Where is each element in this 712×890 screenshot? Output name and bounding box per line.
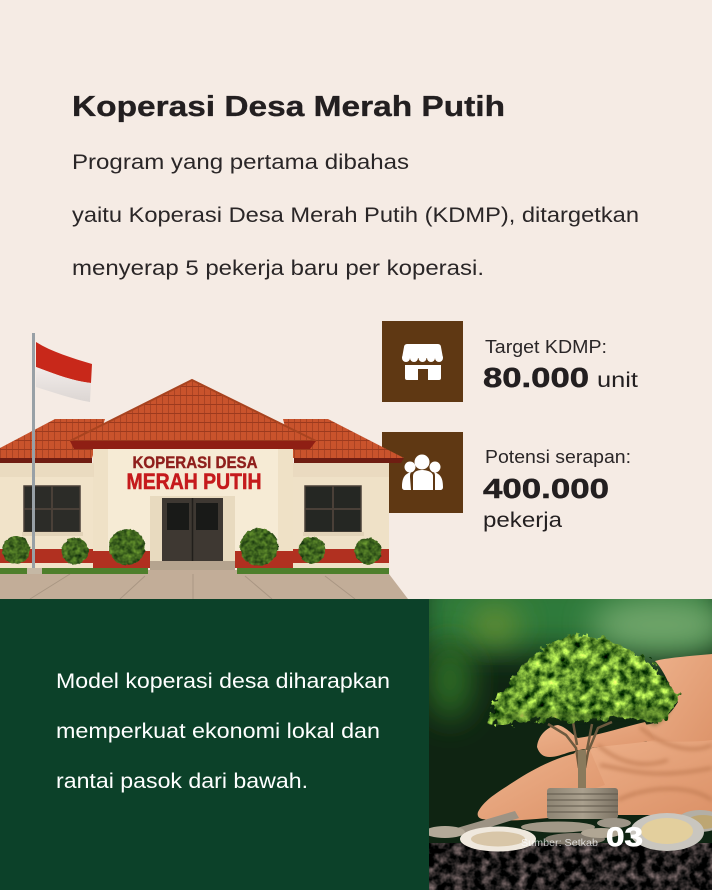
soil — [429, 843, 712, 890]
message text: Model koperasi desa diharapkan — [56, 670, 390, 693]
source note: Sumber: Setkab — [521, 838, 598, 849]
icon: store — [382, 321, 463, 402]
value: 400.000 pekerja — [483, 473, 609, 532]
intro text block: Program yang pertama dibahas — [72, 151, 409, 174]
message text: memperkuat ekonomi lokal dan — [56, 720, 380, 743]
intro text block — [72, 151, 639, 280]
label: target KDMP: Target KDMP: — [485, 337, 607, 357]
photo background — [429, 599, 712, 843]
illustration: koperasi building with flag — [0, 333, 408, 599]
intro text block: menyerap 5 pekerja baru per koperasi. — [72, 257, 484, 280]
photo: tree growing from coins in hand — [429, 599, 712, 890]
title: Koperasi Desa Merah Putih — [72, 91, 505, 123]
value: 400.000 pekerja: pekerja — [483, 509, 562, 532]
windows — [22, 486, 364, 536]
bushes — [2, 528, 382, 566]
crown underside shading — [495, 705, 672, 726]
pavement — [0, 570, 408, 599]
building sign: MERAH PUTIH — [126, 469, 262, 494]
grass — [0, 563, 389, 574]
flag — [36, 342, 92, 402]
hand — [478, 654, 712, 821]
walls — [0, 449, 389, 568]
hand shadows — [598, 727, 712, 800]
side roofs — [0, 419, 404, 463]
value: 400.000 pekerja: 400.000 — [483, 473, 609, 504]
building sign: KOPERASI DESA — [132, 454, 258, 472]
value: 80.000 unit — [483, 362, 638, 393]
stat: potensi serapan — [382, 432, 631, 532]
value: 80.000 unit: unit — [597, 369, 638, 392]
value: 80.000 unit: 80.000 — [483, 362, 589, 393]
label: potensi serapan: Potensi serapan: — [485, 447, 631, 467]
tree crown — [487, 635, 680, 726]
flag pole — [27, 333, 42, 574]
icon: people — [382, 432, 463, 513]
stat: target KDMP — [382, 321, 638, 402]
red base — [0, 549, 389, 568]
coin stack — [547, 788, 618, 819]
intro text block: yaitu Koperasi Desa Merah Putih (KDMP), ditargetkan — [72, 204, 639, 227]
building sign — [126, 454, 262, 494]
message text — [56, 670, 390, 793]
tree trunk and branches — [548, 722, 612, 768]
panel: green message — [0, 599, 429, 890]
page number: 03 — [606, 822, 643, 852]
main roof — [70, 380, 316, 449]
door — [150, 496, 235, 570]
scattered coins — [425, 810, 712, 852]
message text: rantai pasok dari bawah. — [56, 770, 308, 793]
